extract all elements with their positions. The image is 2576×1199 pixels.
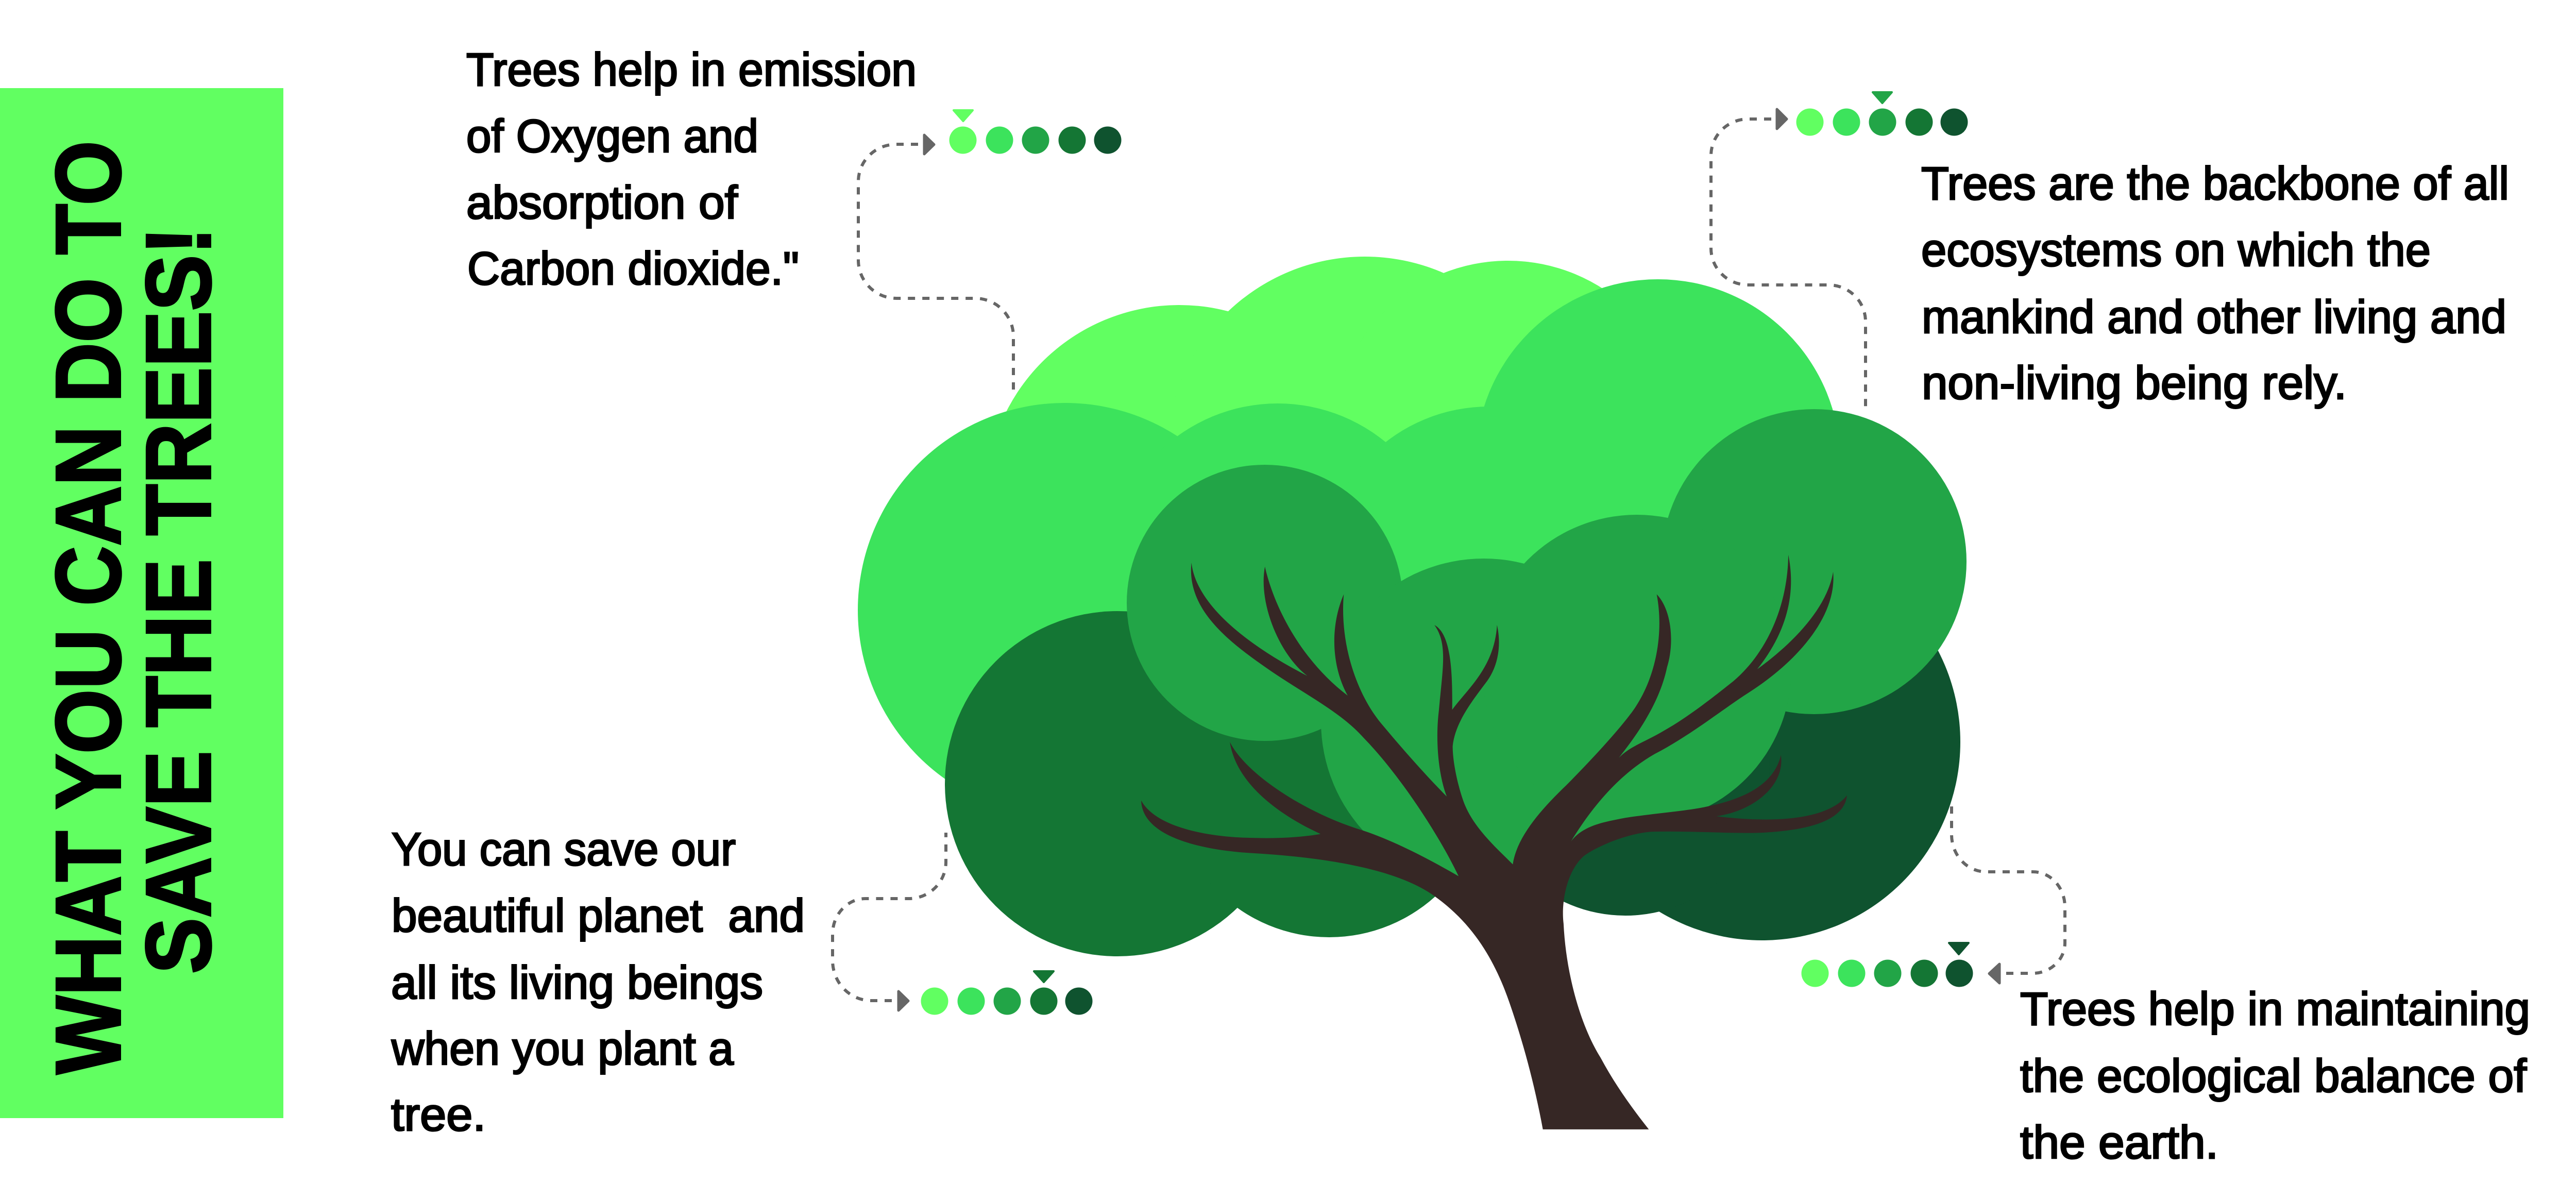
text block: save the planet: tree. xyxy=(391,1089,486,1141)
connector: bottom right xyxy=(1952,806,2065,983)
colour dots: bottom right xyxy=(1801,943,1973,987)
text block: ecosystems: Trees are the backbone of all xyxy=(1921,158,2509,210)
text block: oxygen xyxy=(466,44,917,295)
text block: save the planet: all its living beings xyxy=(391,957,763,1009)
text block: oxygen: absorption of xyxy=(466,177,738,229)
trunk and branches xyxy=(1141,555,1847,1129)
tree illustration xyxy=(858,257,1967,1129)
text block: ecological balance: the earth. xyxy=(2020,1117,2218,1169)
canopy: light layer xyxy=(858,279,1840,817)
text block: ecological balance: Trees help in maintaining xyxy=(2020,984,2530,1035)
text block: oxygen: Trees help in emission xyxy=(466,44,917,96)
connector: top right xyxy=(1711,109,1866,412)
text block: save the planet: You can save our xyxy=(392,824,736,875)
connector: bottom left xyxy=(833,833,946,1010)
text block: ecological balance: the ecological balance of xyxy=(2020,1051,2527,1102)
canopy: mid layer xyxy=(1127,409,1967,884)
title heading: WHAT YOU CAN DO TO xyxy=(37,141,140,1074)
text block: oxygen: of Oxygen and xyxy=(466,111,758,162)
connector: top left xyxy=(858,135,1013,394)
canopy: darkest layer xyxy=(1481,544,1960,940)
colour dots: top right xyxy=(1796,92,1968,136)
colour dots: bottom left xyxy=(921,971,1092,1015)
canopy: lightest layer xyxy=(986,257,1683,693)
text block: ecosystems: ecosystems on which the xyxy=(1921,225,2431,276)
text block: oxygen: Carbon dioxide." xyxy=(467,243,799,295)
text block: ecosystems: non-living being rely. xyxy=(1922,358,2347,409)
text block: save the planet: when you plant a xyxy=(391,1023,734,1075)
colour dots: top left xyxy=(949,110,1121,154)
title heading: SAVE THE TREES! xyxy=(127,227,230,974)
text block: ecosystems: mankind and other living and xyxy=(1922,292,2506,343)
text block: ecological balance xyxy=(2020,984,2530,1169)
title heading xyxy=(37,141,230,1074)
text block: save the planet xyxy=(391,824,805,1141)
canopy: dark layer xyxy=(945,611,1487,956)
title panel xyxy=(0,88,283,1118)
text block: save the planet: beautiful planet and xyxy=(392,890,805,942)
text block: ecosystems xyxy=(1921,158,2509,409)
